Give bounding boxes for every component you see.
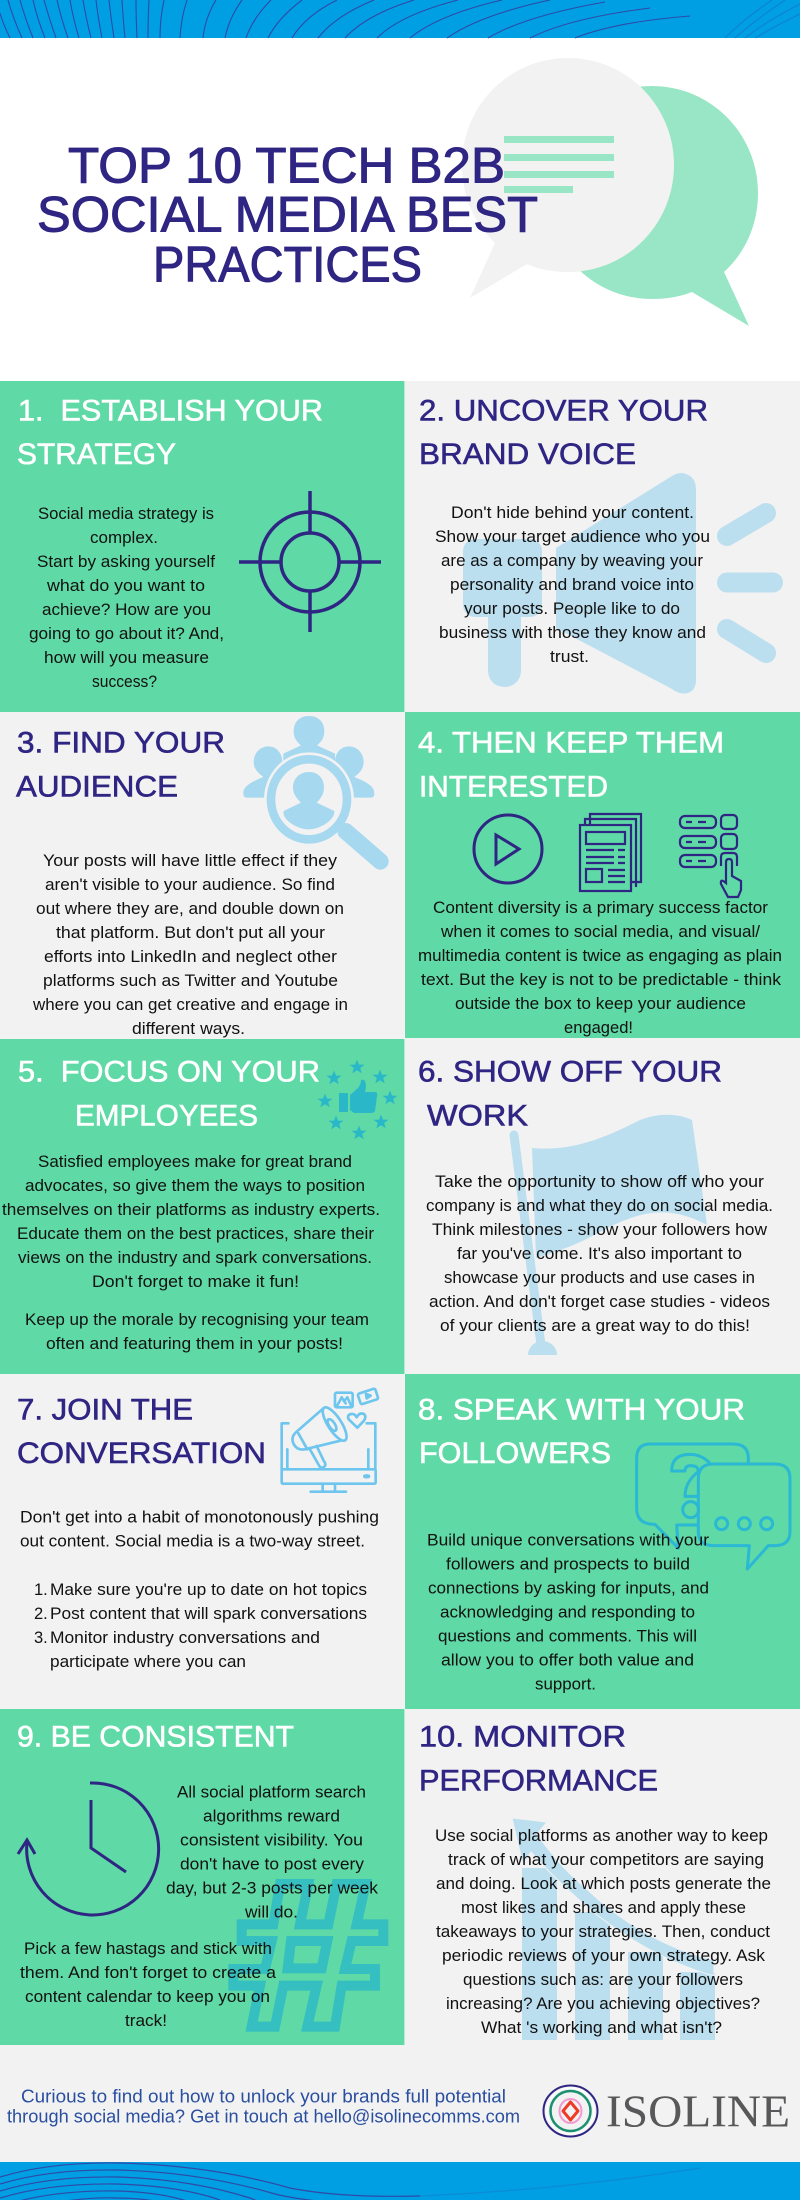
text block 9b [20,1940,277,2030]
text block 9a: consistent visibility. You [180,1832,363,1850]
panel 1: establish your strategy [0,381,404,712]
panel 8: speak with your followers [405,1374,800,1709]
text block 7 [20,1508,379,1550]
icon: clock with arrow [18,1783,159,1915]
numbered list: Make sure you're up to date on hot topics [50,1581,367,1599]
text block 9a [166,1784,379,1922]
text block 6: Take the opportunity to show off who your [435,1173,765,1191]
panel 5: focus on your employees [0,1039,404,1374]
text block 4: Content diversity is a primary success factor [433,899,769,917]
text block 1: success? [92,673,157,691]
chart: rising bars with arrow [512,1818,715,2040]
text block 2: personality and brand voice into [450,576,694,594]
heading 7: 7. JOIN THE [17,1394,193,1426]
icon: question and chat bubbles [637,1444,790,1569]
text block 5: advocates, so give them the ways to position [25,1177,365,1195]
heading 4 [418,726,724,804]
text block 4: engaged! [564,1019,633,1037]
text block 1: complex. [90,529,158,547]
text block 4: outside the box to keep your audience [455,995,746,1013]
heading 1 [17,394,323,471]
text block 9b: them. And fon't forget to create a [20,1964,277,1982]
text block 8 [427,1532,710,1694]
text block 1: Start by asking yourself [37,553,215,571]
text block 3: aren't visible to your audience. So find [45,876,335,894]
bottom decorative band [0,2162,800,2200]
text block 10 [435,1827,771,2037]
title: TOP 10 TECH B2B [68,138,505,194]
grey bubble [462,58,674,298]
numbered list: 2. [34,1605,48,1623]
Isoline logo [544,2086,790,2136]
logo mark [544,2086,598,2136]
text block 3: different ways. [132,1020,245,1038]
heading 1: 1. ESTABLISH YOUR [18,394,323,428]
heading 7 [17,1394,266,1470]
text block 8: connections by asking for inputs, and [428,1580,709,1598]
icon: megaphone [463,473,773,694]
heading 2 [419,394,708,471]
text block 9a: algorithms reward [203,1808,340,1826]
heading 7: CONVERSATION [17,1437,266,1470]
text block 5: Keep up the morale by recognising your team [25,1311,369,1329]
text block 3 [32,852,348,1038]
text block 3: efforts into LinkedIn and neglect other [44,948,338,966]
text block 10: Use social platforms as another way to keep [435,1827,768,1845]
text block 7: out content. Social media is a two-way street. [20,1532,365,1550]
heading 3: 3. FIND YOUR [17,726,225,760]
panel 3: find your audience [0,712,404,1039]
text block 4: text. But the key is not to be predictable - think [421,971,782,989]
icon: document stack [580,814,641,891]
text block 3: that platform. But don't put all your [56,924,326,942]
text block 3: where you can get creative and engage in [32,996,348,1014]
text block 2 [435,504,710,666]
logo wordmark: ISOLINE [606,2086,790,2136]
text block 10: periodic reviews of your own strategy. Ask [442,1947,766,1965]
numbered list: Monitor industry conversations and [50,1629,320,1647]
footer background [0,2045,800,2162]
text block 5: often and featuring them in your posts! [46,1335,343,1353]
text block 1: how will you measure [44,649,209,667]
icon: monitor with megaphone [282,1388,378,1492]
text block 8: acknowledging and responding to [440,1604,695,1622]
heading 8: FOLLOWERS [419,1437,611,1470]
heading 4: 4. THEN KEEP THEM [418,726,724,760]
text block 5 [2,1153,380,1353]
panel 9: be consistent [0,1709,404,2045]
numbered list [34,1581,367,1671]
panel 7: join the conversation [0,1374,404,1709]
heading 3: AUDIENCE [16,770,178,804]
header speech bubbles [462,58,758,326]
panel 6: show off your work [405,1038,800,1374]
text block 10: and doing. Look at which posts generate the [436,1875,771,1893]
text block 10: track of what your competitors are saying [448,1851,764,1869]
text block 5: themselves on their platforms as industry experts. [2,1201,380,1219]
numbered list: participate where you can [50,1653,246,1671]
heading 4: INTERESTED [419,770,608,804]
text block 5: Satisfied employees make for great brand [38,1153,352,1171]
text block 6: company is and what they do on social media. [426,1197,773,1215]
text block 6: of your clients are a great way to do this! [440,1317,750,1335]
heading 10 [419,1720,658,1798]
text block 1 [29,505,224,691]
heading 1: STRATEGY [17,438,176,471]
heading 2: BRAND VOICE [419,438,636,471]
heading 5: 5. FOCUS ON YOUR [18,1056,320,1088]
text block 10: increasing? Are you achieving objectives? [446,1995,760,2013]
text block 9a: day, but 2-3 posts per week [166,1880,379,1898]
text block 4: multimedia content is twice as engaging as plain [418,947,782,965]
text block 2: your posts. People like to do [464,600,680,618]
heading 6 [418,1056,722,1132]
text block 6: showcase your products and use cases in [444,1269,755,1287]
footer call to action: through social media? Get in touch at hello@isolinecomms.com [7,2106,520,2126]
text block 3: platforms such as Twitter and Youtube [43,972,338,990]
text block 10: What 's working and what isn't? [481,2019,722,2037]
text block 5: Don't forget to make it fun! [92,1273,299,1291]
text block 4: when it comes to social media, and visual/ [440,923,760,941]
text block 1: what do you want to [46,577,205,595]
heading 2: 2. UNCOVER YOUR [419,394,708,428]
text block 1: going to go about it? And, [29,625,224,643]
footer call to action [7,2086,520,2126]
green bubble [546,86,758,326]
text block 9a: will do. [244,1904,298,1922]
text block 3: Your posts will have little effect if they [43,852,338,870]
icon: options with pointing hand [680,815,741,897]
numbered list: 3. [34,1629,48,1647]
text block 6 [426,1173,773,1335]
text block 9b: track! [125,2012,167,2030]
text block 6: action. And don't forget case studies - videos [429,1293,770,1311]
heading 10: 10. MONITOR [419,1720,626,1754]
text block 9a: All social platform search [177,1784,366,1802]
icon: thumbs up with stars [318,1060,398,1139]
heading 8 [418,1394,745,1470]
text block 2: trust. [550,648,589,666]
bubble text lines [504,136,614,193]
text block 7: Don't get into a habit of monotonously pushing [20,1508,379,1526]
text block 4 [418,899,782,1037]
text block 8: followers and prospects to build [446,1556,690,1574]
text block 6: far you've come. It's also important to [457,1245,742,1263]
icon: magnifier with audience [243,716,380,861]
heading 6: WORK [427,1100,528,1132]
icon: play button [474,815,542,883]
numbered list: Post content that will spark conversations [50,1605,367,1623]
text block 8: allow you to offer both value and [441,1652,694,1670]
heading 9: 9. BE CONSISTENT [17,1720,294,1754]
text block 10: takeaways to your strategies. Then, conduct [436,1923,770,1941]
icon: target [239,491,381,632]
text block 10: most likes and shares and apply these [461,1899,746,1917]
title: SOCIAL MEDIA BEST [37,186,538,242]
icon: hashtag [233,1884,383,2027]
title: PRACTICES [153,236,422,292]
heading 5 [18,1056,320,1132]
text block 2: are as a company by weaving your [441,552,704,570]
icon: flag [514,1115,707,1355]
text block 2: Don't hide behind your content. [451,504,694,522]
text block 2: business with those they know and [439,624,706,642]
panel 10: monitor performance [405,1709,800,2045]
text block 5: views on the industry and spark conversations. [18,1249,372,1267]
text block 9b: content calendar to keep you on [25,1988,270,2006]
text block 8: support. [535,1676,596,1694]
text block 8: questions and comments. This will [438,1628,697,1646]
panel 2: uncover your brand voice [405,381,800,712]
text block 2: Show your target audience who you [435,528,710,546]
text block 5: Educate them on the best practices, share their [17,1225,375,1243]
text block 8: Build unique conversations with your [427,1532,710,1550]
heading 5: EMPLOYEES [75,1100,258,1132]
text block 9b: Pick a few hastags and stick with [24,1940,272,1958]
text block 3: out where they are, and double down on [36,900,344,918]
heading 8: 8. SPEAK WITH YOUR [418,1394,745,1426]
top decorative band [0,0,800,38]
footer call to action: Curious to find out how to unlock your brands full potential [21,2086,506,2106]
text block 9a: don't have to post every [180,1856,365,1874]
text block 1: achieve? How are you [42,601,211,619]
title [37,138,538,292]
panel 4: then keep them interested [405,712,800,1038]
numbered list: 1. [34,1581,48,1599]
heading 3 [16,726,225,804]
heading 10: PERFORMANCE [419,1764,658,1798]
text block 10: questions such as: are your followers [463,1971,743,1989]
heading 6: 6. SHOW OFF YOUR [418,1056,722,1088]
text block 1: Social media strategy is [38,505,214,523]
text block 6: Think milestones - show your followers how [432,1221,767,1239]
